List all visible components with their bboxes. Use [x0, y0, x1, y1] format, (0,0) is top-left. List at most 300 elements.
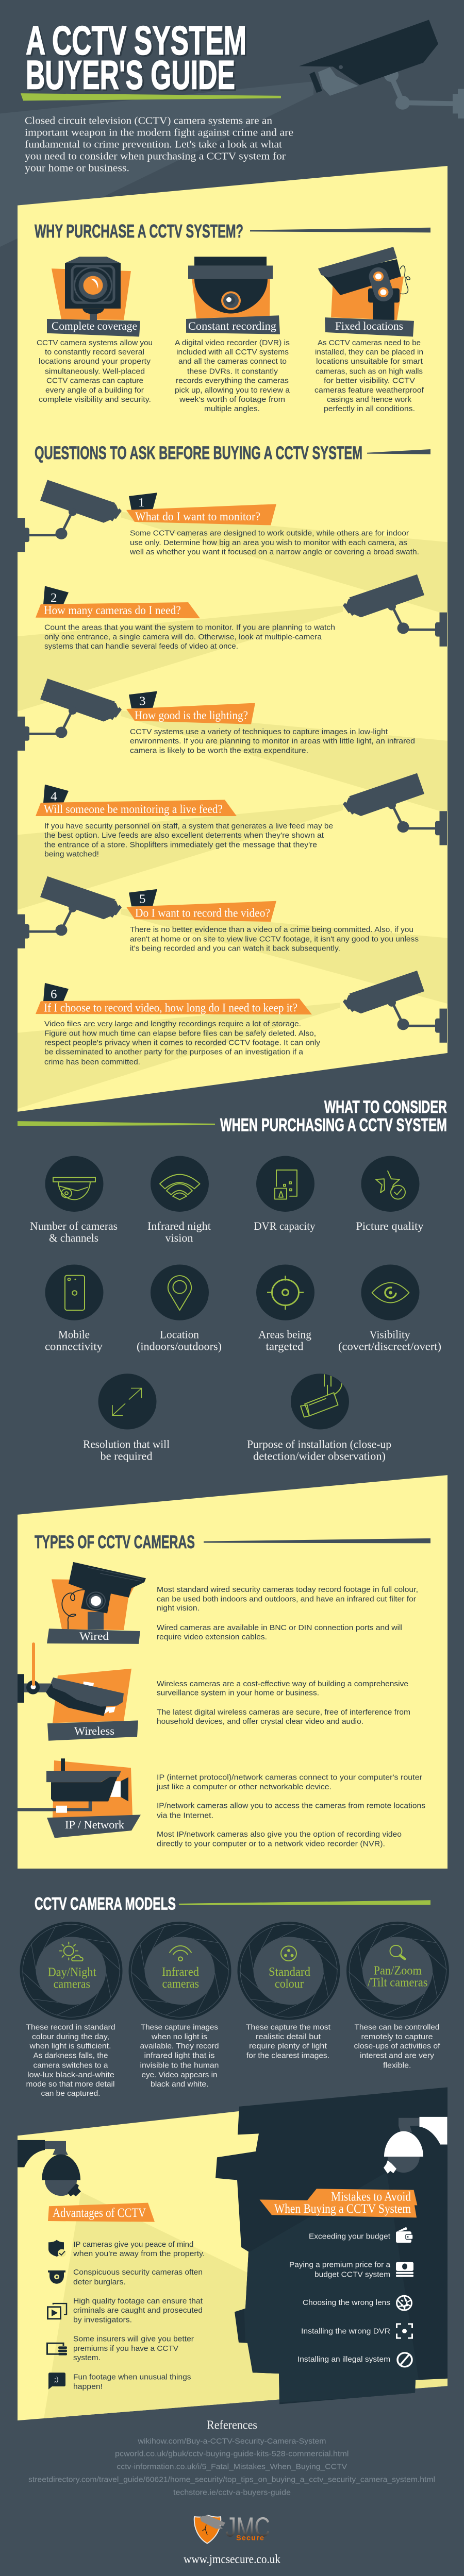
description: household devices, and offer crystal clear video and audio. [157, 1717, 363, 1726]
type: wireless [18, 1642, 410, 1741]
description: Most IP/network cameras also give you the option of recording video [157, 1830, 402, 1839]
number badge: 1 [138, 496, 144, 510]
label: detection/wider observation) [253, 1449, 386, 1462]
question 2 [36, 574, 447, 651]
label: Constant recording [188, 320, 276, 332]
heading: why purchase: WHY PURCHASE A CCTV SYSTEM? [35, 221, 243, 242]
reference list [28, 2437, 435, 2497]
description: locations around your property [39, 357, 151, 366]
description [354, 2023, 440, 2070]
description [140, 2023, 219, 2089]
icon: dome camera [188, 257, 273, 318]
question title: Will someone be monitoring a live feed? [44, 803, 223, 816]
answer: being watched! [44, 850, 99, 858]
answer: Figure out how much time can elapse before files can be safely deleted. Also, [44, 1029, 316, 1038]
description: week's worth of footage from [179, 395, 285, 404]
answer: If you have security personnel on staff, a system that generates a live feed may be [44, 822, 333, 831]
description: via the Internet. [157, 1811, 213, 1820]
description [157, 1585, 418, 1641]
label [147, 1219, 211, 1244]
description: for the clearest images. [246, 2052, 329, 2060]
label: Purpose of installation (close-up [247, 1437, 391, 1450]
description: camera switches to a [33, 2061, 108, 2070]
description [37, 338, 153, 404]
question band [126, 703, 255, 724]
description: can be captured. [41, 2089, 100, 2098]
description: included with all CCTV systems [176, 348, 289, 357]
description: and all the cameras connect to [178, 357, 287, 366]
type: IP / network [18, 1758, 425, 1848]
description: night vision. [157, 1604, 200, 1613]
icon: ceiling camera [291, 1372, 349, 1430]
description: Most standard wired security cameras today record footage in full colour, [157, 1585, 418, 1594]
title: A CCTV SYSTEM [26, 18, 246, 63]
icon: dome camera dark [18, 2140, 81, 2196]
answer: Some CCTV cameras are designed to work outside, while others are for indoor [130, 529, 409, 538]
icon: wallet [396, 2227, 413, 2243]
description [314, 338, 424, 413]
iris [129, 1922, 231, 2020]
description: interest and are very [360, 2052, 434, 2060]
label: IP / Network [65, 1818, 125, 1831]
icon: camera [343, 971, 447, 1043]
description: Wireless cameras are a cost-effective way of building a comprehensive [157, 1680, 408, 1688]
question band [36, 800, 237, 816]
title: BUYER'S GUIDE [26, 53, 235, 98]
advantage: peace of mind [48, 2240, 205, 2258]
icon: resize arrows [98, 1374, 157, 1430]
reference list: pcworld.co.uk/gbuk/cctv-buying-guide-kits-528-commercial.html [115, 2450, 349, 2459]
answer [44, 1020, 320, 1066]
text: Installing the wrong DVR [301, 2327, 390, 2335]
description: eye. Video appears in [141, 2071, 218, 2079]
description: every angle of a building for [45, 386, 144, 395]
panel: what to consider [18, 1097, 447, 1462]
answer [130, 925, 419, 953]
label: Mobile [58, 1328, 90, 1341]
answer [44, 623, 335, 651]
description: CCTV camera systems allow you [37, 338, 153, 347]
heading [220, 1097, 447, 1135]
icon: camera [343, 773, 447, 845]
description: multiple angles. [204, 404, 260, 413]
icon: eye [361, 1264, 420, 1320]
item: visibility [338, 1264, 441, 1353]
label: (indoors/outdoors) [137, 1340, 222, 1353]
text [73, 2335, 194, 2362]
description: black and white. [151, 2080, 208, 2089]
description: The latest digital wireless cameras are secure, free of interference from [157, 1708, 410, 1717]
answer: it's being recorded and you can watch it back subsequently. [130, 944, 340, 953]
description: mode so that more detail [26, 2080, 114, 2089]
answer: use only. Determine how big an area you wish to monitor with each camera, as [130, 538, 407, 547]
intro text [25, 115, 293, 174]
icon: camera [18, 679, 122, 751]
title underline [21, 93, 281, 100]
heading rule [367, 449, 430, 454]
heading rule [179, 1900, 430, 1905]
label: Number of cameras [30, 1219, 118, 1232]
text [73, 2268, 203, 2286]
icon: aperture [397, 2296, 411, 2310]
text: system. [73, 2353, 101, 2362]
item: mobile connectivity [45, 1264, 103, 1353]
wordmark: JMC [225, 2511, 270, 2543]
section band [260, 2189, 417, 2217]
answer: respect people's privacy when it comes to recorded CCTV footage. It can only [44, 1039, 320, 1047]
text: Choosing the wrong lens [303, 2298, 390, 2307]
label: connectivity [45, 1340, 103, 1353]
description: IP/network cameras allow you to access the cameras from remote locations [157, 1802, 425, 1810]
description: cameras feature weatherproof [314, 386, 424, 395]
icon: dome camera [45, 1156, 103, 1212]
spotlight beam [244, 2252, 419, 2400]
label [45, 1328, 103, 1353]
item: DVR capacity [254, 1156, 316, 1232]
text [289, 2261, 391, 2279]
number badge: 3 [139, 694, 145, 708]
heading: CCTV CAMERA MODELS [35, 1894, 176, 1913]
item: areas being targeted [256, 1264, 314, 1353]
icon: chat bubble [48, 2372, 65, 2389]
text: when you're away from the property. [73, 2249, 205, 2258]
question band [126, 504, 276, 526]
question title: What do I want to monitor? [135, 510, 260, 523]
number badge [129, 493, 157, 510]
label [258, 1328, 311, 1353]
panel: mistakes to avoid [216, 2087, 448, 2404]
description: invisible to the human [140, 2061, 219, 2070]
description [157, 1680, 410, 1726]
description: low-lux black-and-white [27, 2071, 114, 2079]
label: Wired [79, 1630, 109, 1642]
label: Infrared night [147, 1219, 211, 1232]
text: budget CCTV system [314, 2270, 390, 2279]
icon: signal arcs [170, 1946, 191, 1961]
description: require video extension cables. [157, 1633, 267, 1641]
label band [47, 1629, 140, 1644]
description: realistic detail but [256, 2032, 321, 2041]
label band [47, 319, 140, 337]
answer: aren't at home or on site to view live CCTV footage, it isn't any good to you unless [130, 935, 419, 943]
label [30, 1219, 118, 1244]
mistake: wrong lens [303, 2296, 411, 2310]
icon: cash stack [396, 2262, 413, 2277]
number badge: 4 [51, 790, 57, 803]
description: flexible. [383, 2061, 411, 2070]
label band [325, 317, 414, 337]
description: when light is sufficient. [29, 2042, 111, 2050]
text: Some insurers will give you better [73, 2335, 194, 2343]
text: Paying a premium price for a [289, 2261, 391, 2269]
description: perfectly in all conditions. [324, 404, 415, 413]
text: premiums if you have a CCTV [73, 2344, 179, 2353]
feature: complete coverage [37, 257, 153, 404]
answer: crime has been committed. [44, 1058, 140, 1066]
iris [237, 1922, 340, 2020]
label [83, 1437, 170, 1462]
text: Fun footage when unusual things [73, 2373, 191, 2382]
label: Location [160, 1328, 199, 1341]
icon: header security camera [299, 20, 464, 118]
description: can be used both indoors and outdoors, and have an infrared cut filter for [157, 1595, 416, 1603]
question 5 [18, 876, 419, 953]
label band [47, 1815, 141, 1838]
answer [130, 727, 415, 755]
label band [47, 1720, 138, 1741]
description: CCTV cameras can capture [46, 377, 143, 385]
label: Fixed locations [335, 320, 403, 332]
label: (covert/discreet/overt) [338, 1340, 441, 1353]
description: remotely to capture [361, 2032, 433, 2041]
description: colour during the day, [32, 2032, 109, 2041]
description: records everything the cameras [176, 377, 289, 385]
icon: chat bubble: ;) [54, 2376, 59, 2383]
feature: constant recording [175, 257, 290, 413]
icon: dome camera white [384, 2117, 448, 2174]
description: These record in standard [26, 2023, 115, 2032]
answer: systems that can handle several feeds of video at once. [44, 642, 238, 651]
icon: bullet camera [318, 247, 410, 320]
text: Conspicuous security cameras often [73, 2268, 203, 2277]
answer: the entrance of a store. Shoplifters immediately get the message that they're [44, 841, 317, 849]
section title: Advantages of CCTV [53, 2206, 146, 2220]
advantage: insurance premiums [47, 2335, 194, 2362]
reference list: cctv-information.co.uk/i/5_Fatal_Mistakes_When_Buying_CCTV [117, 2463, 347, 2471]
question title: If I choose to record video, how long do I need to keep it? [44, 1002, 297, 1014]
panel: why purchase and questions [18, 166, 448, 1112]
text [73, 2373, 191, 2391]
mistake: exceeding budget [309, 2227, 413, 2243]
item: resolution [83, 1374, 170, 1462]
number badge [43, 586, 69, 605]
question band [36, 998, 312, 1014]
description [246, 2023, 331, 2060]
item: number of cameras [30, 1156, 118, 1244]
description [175, 338, 290, 413]
answer [129, 529, 419, 556]
description: these DVRs. It constantly [187, 367, 278, 376]
icon: target [256, 1264, 314, 1320]
model name [269, 1965, 310, 1991]
text: High quality footage can ensure that [73, 2297, 203, 2306]
label band [186, 315, 280, 334]
description: These capture images [141, 2023, 218, 2032]
panel: advantages of CCTV [18, 2088, 448, 2420]
model name [162, 1965, 199, 1991]
model name: Day/Night [48, 1965, 96, 1979]
answer: only one entrance, a single camera will do. Otherwise, look at multiple-camera [44, 633, 322, 641]
description: pick up, allowing you to review a [175, 386, 290, 395]
icon: star with check [361, 1156, 420, 1212]
label: vision [165, 1231, 193, 1244]
iris [20, 1922, 123, 2020]
icon: wireless camera [18, 1642, 131, 1723]
description: require plenty of light [249, 2042, 327, 2050]
question 3 [18, 679, 415, 755]
label [338, 1328, 441, 1353]
model name: Infrared [162, 1965, 199, 1979]
icon: sun and cloud [60, 1942, 83, 1961]
answer: environments. If you are planning to monitor in areas with little light, an infrared [130, 737, 415, 745]
icon: network camera [18, 1758, 132, 1818]
heading rule [18, 1121, 215, 1126]
spotlight beam [44, 2192, 448, 2419]
mistake: wrong DVR [301, 2324, 412, 2338]
icon: DVR unit [256, 1156, 314, 1212]
model: standard colour [237, 1922, 340, 2060]
label [247, 1437, 391, 1462]
wordmark sub: Secure [236, 2534, 264, 2543]
number badge: 6 [51, 988, 57, 1001]
icon: wired camera [52, 1562, 146, 1630]
text [73, 2297, 203, 2324]
description: when no light is [151, 2032, 207, 2041]
spotlight beams [18, 512, 448, 1109]
model name: /Tilt cameras [368, 1976, 427, 1989]
description: complete visibility and security. [39, 395, 151, 404]
answer: the best option. Live feeds are also excellent deterrents when they're shown at [44, 831, 324, 840]
icon: lens dots [281, 1946, 296, 1961]
question 6 [36, 971, 447, 1066]
question title: How many cameras do I need? [44, 604, 181, 617]
text: happen! [73, 2382, 103, 2391]
item: location [137, 1264, 222, 1353]
model name [368, 1964, 428, 1989]
description [156, 1773, 425, 1848]
advantage: fun footage [48, 2372, 191, 2391]
description: to constantly record several [45, 348, 144, 357]
icon: box camera [52, 257, 131, 321]
label [137, 1328, 222, 1353]
description [26, 2023, 115, 2098]
label: Visibility [369, 1328, 410, 1341]
description: locations unsuitable for smart [316, 357, 423, 366]
reference list: wikihow.com/Buy-a-CCTV-Security-Camera-System [137, 2437, 326, 2446]
model name [48, 1965, 96, 1991]
answer: camera is likely to be worth the extra expenditure. [130, 747, 308, 755]
number badge [43, 983, 69, 1001]
heading rule [250, 228, 430, 232]
references heading: References [207, 2418, 257, 2432]
description: infrared light that is [144, 2052, 215, 2060]
type: wired [47, 1562, 418, 1644]
panel: header [0, 18, 464, 247]
description: installed, they can be placed in [315, 348, 423, 357]
label: Areas being [258, 1328, 311, 1341]
question title: How good is the lighting? [135, 709, 248, 722]
intro text: fundamental to crime prevention. Let's take a look at what [25, 139, 282, 150]
icon: wifi signal [151, 1156, 209, 1212]
text: Installing an illegal system [297, 2355, 390, 2364]
description: available. They record [140, 2042, 219, 2050]
heading rule [204, 1538, 430, 1543]
references [28, 2418, 435, 2497]
heading: TYPES OF CCTV CAMERAS [35, 1532, 195, 1552]
answer: Video files are very large and lengthy recordings require a lot of storage. [44, 1020, 301, 1028]
label: Complete coverage [52, 320, 137, 332]
icon: device with coins [47, 2343, 67, 2355]
website url: www.jmcsecure.co.uk [184, 2553, 281, 2566]
iris [346, 1922, 449, 2020]
text: Exceeding your budget [309, 2232, 391, 2241]
item: picture quality [356, 1156, 424, 1232]
intro text: Closed circuit television (CCTV) camera systems are an [25, 115, 272, 126]
model: pan/zoom/tilt [346, 1922, 449, 2070]
icon: focus frame [397, 2324, 412, 2338]
model name: Pan/Zoom [373, 1964, 422, 1977]
icon: shield [48, 2240, 66, 2257]
label: DVR capacity [254, 1219, 316, 1232]
label: Picture quality [356, 1219, 424, 1232]
answer: Count the areas that you want the system to monitor. If you are planning to watch [44, 623, 335, 632]
section title: When Buying a CCTV System [274, 2201, 411, 2216]
item: infrared night vision [147, 1156, 211, 1244]
icon: phone [45, 1264, 103, 1320]
description: just like a computer or other networkable device. [156, 1783, 332, 1791]
icon: camera [18, 876, 122, 948]
item: purpose of installation [247, 1372, 391, 1462]
description: As CCTV cameras need to be [318, 338, 421, 347]
panel: CCTV camera models [20, 1894, 449, 2098]
answer: well as whether you want it focused on a narrow angle or covering a broad swath. [129, 548, 419, 556]
reference list: streetdirectory.com/travel_guide/60621/home_security/top_tips_on_buying_a_cctv_security_camera_system.html [28, 2476, 435, 2484]
description: surveillance system in your home or business. [157, 1689, 319, 1697]
icon: magnifier [390, 1945, 405, 1959]
description: directly to your computer or to a network video recorder (NVR). [157, 1840, 385, 1848]
icon: camera [343, 574, 447, 647]
description: for better visibility. CCTV [324, 377, 416, 385]
logo: JMC Secure [194, 2511, 270, 2544]
icon: dome camera [48, 2270, 65, 2284]
answer: CCTV systems use a variety of techniques to capture images in low-light [130, 727, 388, 736]
description: casings and hence work [327, 395, 411, 404]
number badge: 5 [139, 892, 145, 906]
feature: fixed locations [314, 247, 424, 413]
panel: types of CCTV cameras [18, 1475, 448, 1869]
description: cameras, such as on high walls [316, 367, 423, 376]
label: Resolution that will [83, 1437, 170, 1450]
number badge: 2 [51, 591, 57, 605]
description: A digital video recorder (DVR) is [175, 338, 290, 347]
text: by investigators. [73, 2316, 132, 2324]
icon: map pin [151, 1264, 209, 1320]
description: These capture the most [246, 2023, 331, 2032]
section band [48, 2203, 155, 2222]
intro text: your home or business. [25, 163, 129, 174]
icon: shield with camera [194, 2515, 225, 2544]
description: close-ups of activities of [354, 2042, 440, 2050]
number badge [129, 889, 157, 906]
label: & channels [49, 1231, 98, 1244]
number badge [43, 785, 69, 803]
text: criminals are caught and prosecuted [73, 2306, 203, 2315]
text [73, 2240, 205, 2258]
answer [44, 822, 333, 858]
section title: Mistakes to Avoid [331, 2189, 411, 2204]
intro text: important weapon in the modern fight against crime and are [25, 127, 293, 138]
label: targeted [266, 1340, 304, 1353]
answer: be disseminated to another party for the purposes of an investigation if a [44, 1048, 304, 1057]
title [26, 18, 246, 98]
section title [274, 2189, 411, 2216]
spotlight beam from header camera [0, 81, 313, 247]
model name: cameras [162, 1977, 199, 1991]
advantage: deter burglars [48, 2268, 203, 2286]
model: infrared [129, 1922, 231, 2089]
label: Wireless [74, 1725, 114, 1737]
description: As darkness falls, the [33, 2052, 108, 2060]
